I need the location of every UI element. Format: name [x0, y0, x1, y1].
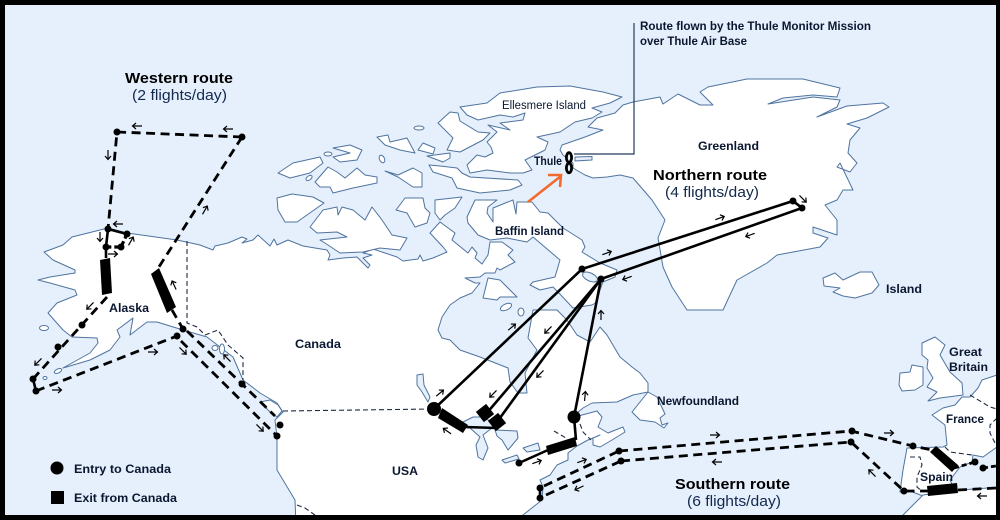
place labels: Britain [949, 362, 988, 374]
land: Iceland [823, 272, 879, 298]
thule inlet [575, 156, 592, 161]
place labels: Alaska [109, 303, 150, 315]
place labels: Baffin Island [495, 226, 564, 238]
land: Ireland [899, 365, 923, 391]
callout text: Thule Monitor Mission [640, 21, 871, 48]
legend [50, 462, 178, 505]
heading: Western route [125, 70, 233, 104]
place labels: Greenland [698, 141, 759, 153]
place labels: Ellesmere Island [502, 100, 586, 112]
land: Baffin Island [467, 200, 617, 308]
place labels: Thule [534, 156, 562, 168]
heading: Western route: (2 flights/day) [132, 87, 227, 104]
place labels: Newfoundland [657, 396, 739, 408]
route: Southern [536, 428, 996, 502]
legend: exit marker [51, 491, 64, 504]
southern route markers [536, 428, 986, 502]
heading: Southern route [675, 476, 790, 510]
heading: Northern route: (4 flights/day) [665, 184, 759, 201]
legend: exit label: Exit from Canada [74, 493, 178, 505]
heading: Northern route [653, 167, 767, 201]
place labels [109, 100, 988, 484]
place labels: Canada [295, 339, 342, 351]
lakes [417, 374, 540, 463]
land: Greenland [560, 79, 889, 310]
land: Ellesmere Island [460, 86, 622, 173]
legend: entry marker [50, 462, 64, 474]
land: North America [38, 222, 648, 520]
callout text: Thule Monitor Mission: over Thule Air Base [640, 36, 747, 48]
place labels: Spain [920, 472, 953, 484]
land: Europe [900, 375, 1000, 500]
land: Arctic islands [277, 112, 599, 316]
land: North Africa [900, 487, 1000, 520]
heading: Western route: Western route [125, 70, 233, 87]
heading: Southern route: (6 flights/day) [687, 493, 781, 510]
legend: entry label: Entry to Canada [74, 464, 172, 476]
route: Western [30, 123, 284, 440]
land: Vancouver and Pacific islands [40, 326, 282, 417]
northern route lines [434, 201, 802, 463]
land: Great Britain [922, 337, 963, 401]
land: Newfoundland [632, 392, 668, 428]
callout leader line to Thule route [574, 23, 634, 154]
northern route markers [427, 198, 806, 466]
southern route lines [540, 431, 996, 498]
icon: Thule Monitor Mission figure-eight route [566, 153, 572, 173]
northern route direction arrows [434, 193, 808, 467]
national borders [187, 241, 997, 515]
heading: Southern route: Southern route [675, 476, 790, 493]
place labels: France [946, 414, 984, 426]
southern route direction arrows [574, 430, 987, 499]
place labels: Great [949, 347, 982, 359]
arrow: orange pointer to Thule [528, 175, 561, 202]
place labels: USA [392, 466, 418, 478]
western route markers [30, 128, 284, 440]
western route lines [33, 132, 277, 436]
heading: Northern route: Northern route [653, 167, 767, 184]
western route direction arrows [33, 123, 265, 433]
route: Northern [427, 193, 808, 467]
place labels: Island [886, 284, 922, 296]
callout text: Thule Monitor Mission: Route flown by the Thule Monitor Mission [640, 21, 871, 33]
